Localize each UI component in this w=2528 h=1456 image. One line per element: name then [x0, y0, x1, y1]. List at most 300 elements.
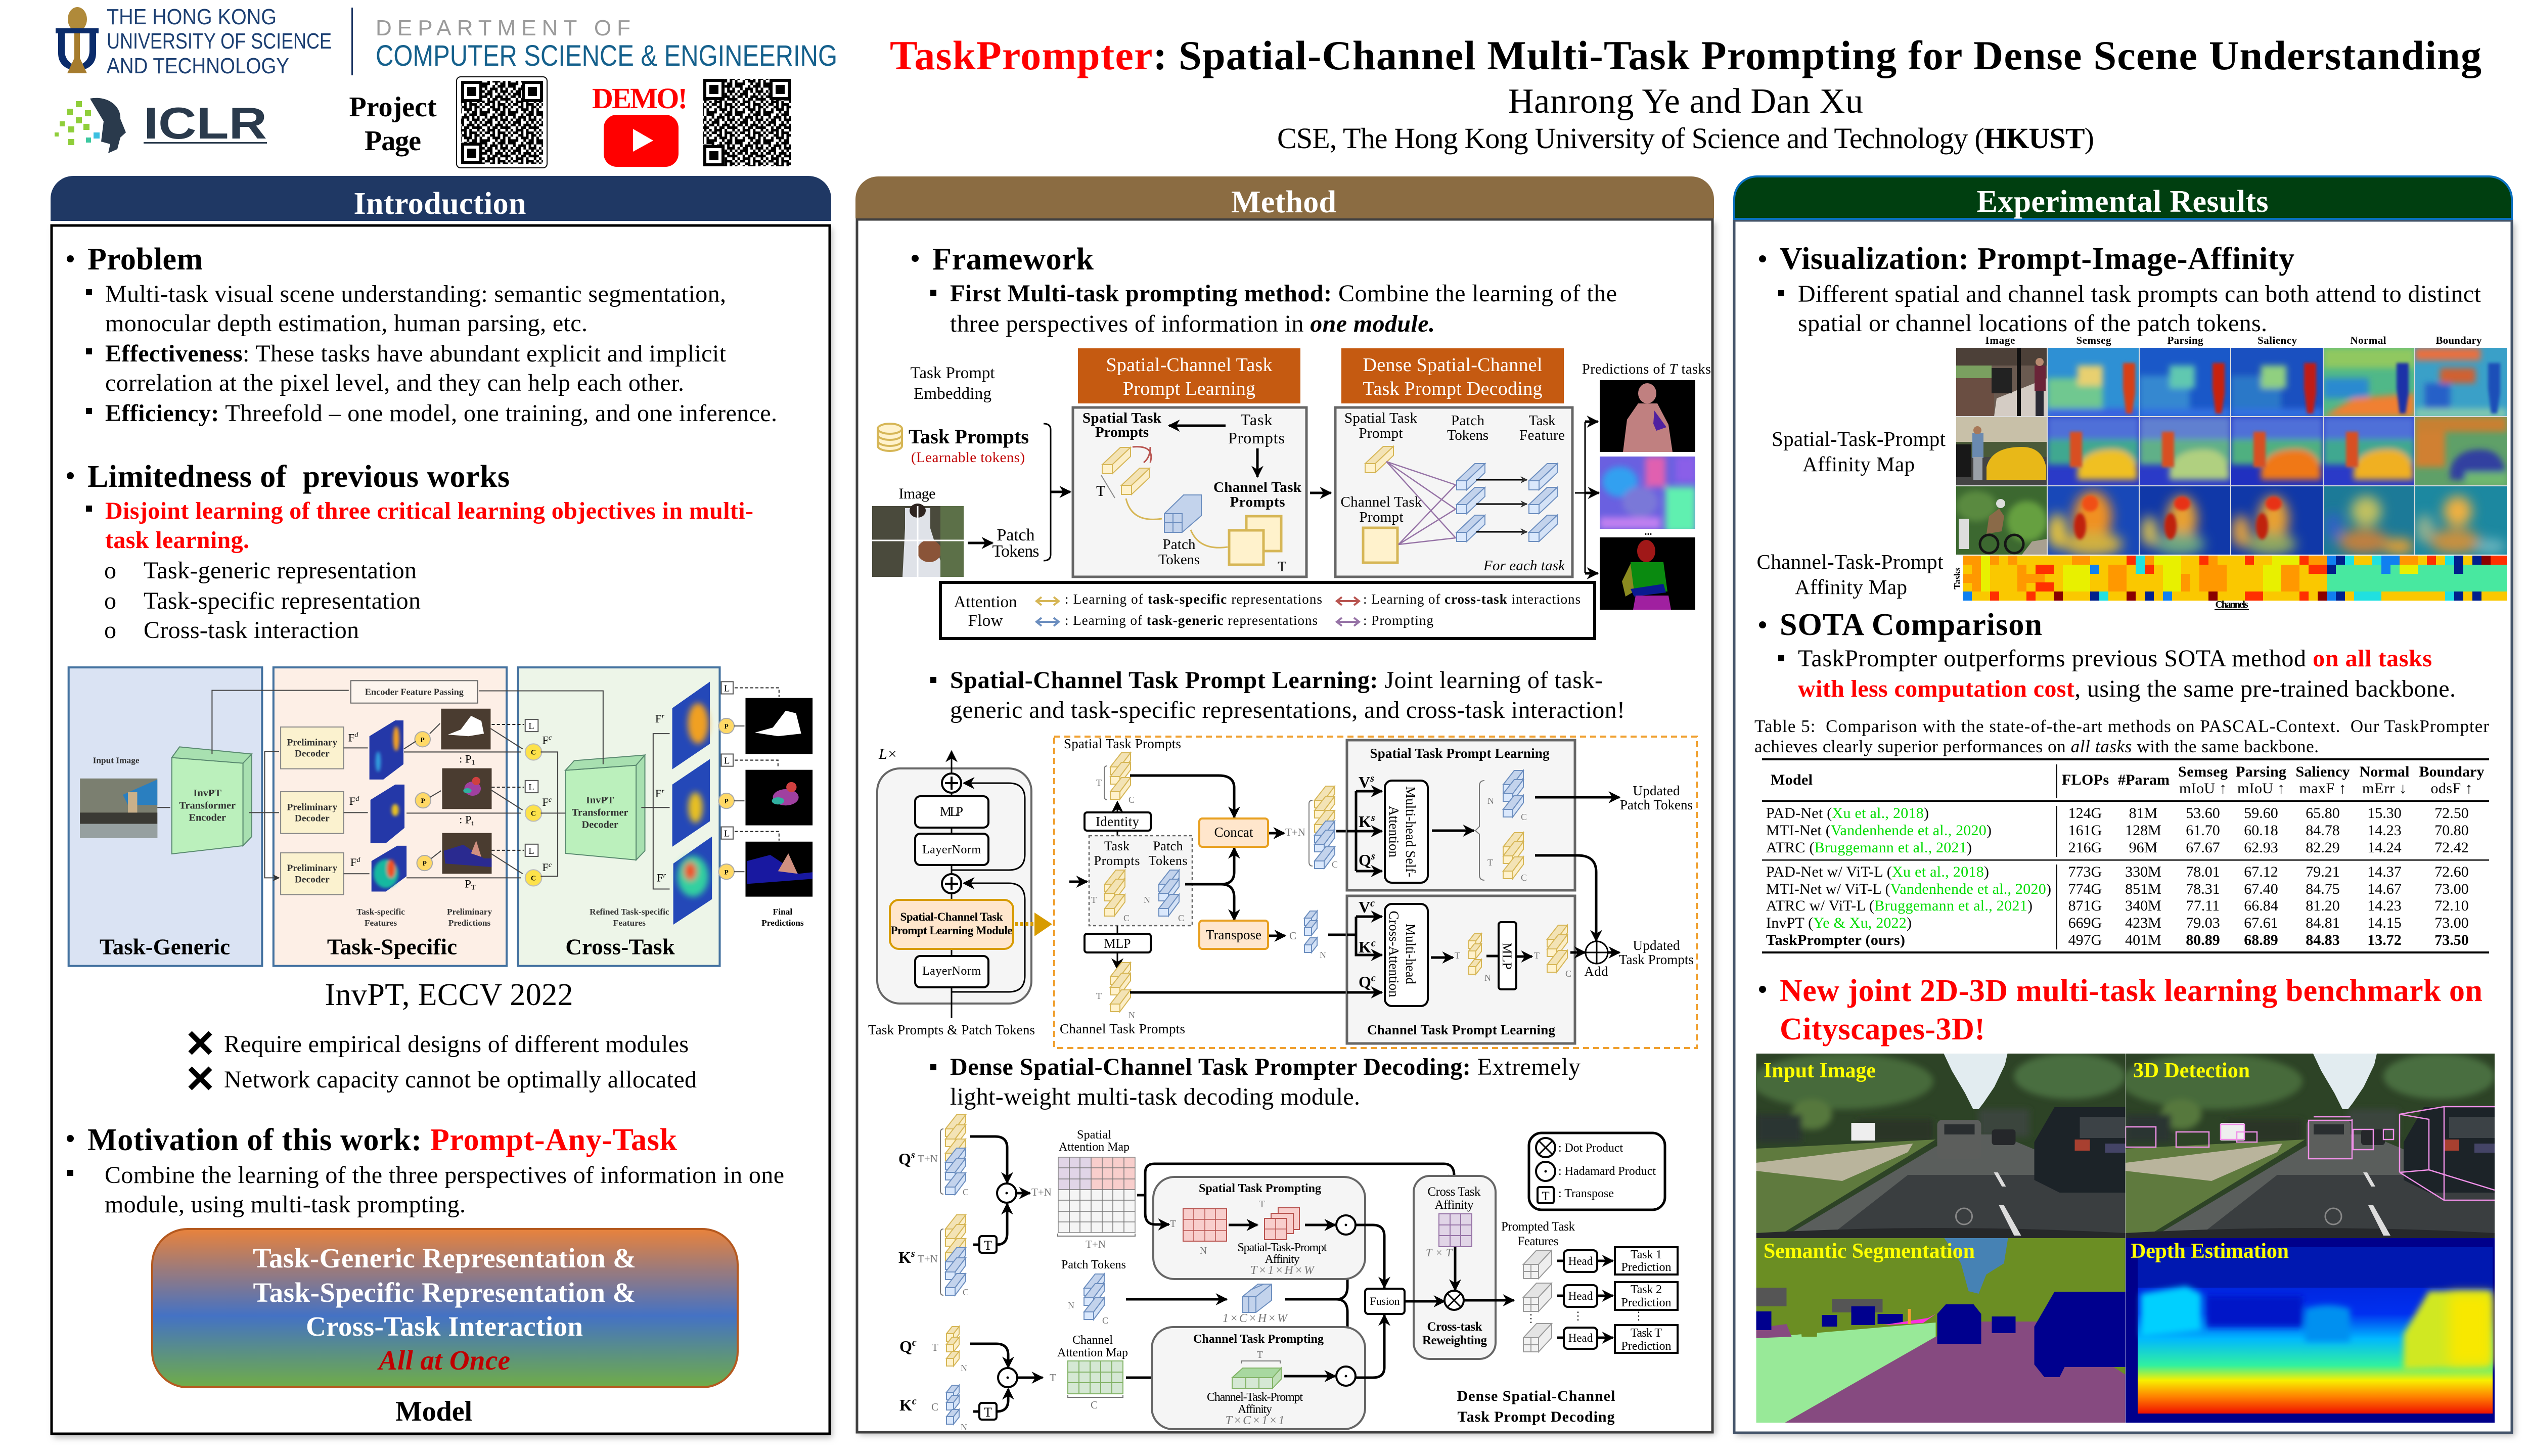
transformer block: LayerNorm: [922, 843, 981, 856]
panel: task-generic: Input Image: [93, 756, 140, 765]
channel attention map: T: [1050, 1372, 1056, 1384]
panel: task-specific: T: [471, 884, 476, 891]
final predictions: Final: [773, 907, 792, 917]
section: problem: Multi-task visual scene understanding: semantic segmentation,: [105, 281, 726, 307]
detail frame: T: [1096, 778, 1102, 788]
box: spatial task prompt learning: N: [1487, 796, 1494, 806]
chart: channel-task-prompt affinity: Channels: [2216, 599, 2248, 610]
table rows: 161G: [2068, 822, 2102, 839]
section: SOTA comparison: SOTA Comparison: [1780, 608, 2042, 642]
box: cross-task reweighting: Cross-task: [1427, 1320, 1482, 1334]
panel: task-generic: Task-Generic: [100, 934, 230, 959]
chart: affinity maps: Saliency: [2258, 334, 2297, 346]
table rows: 67.67: [2186, 839, 2220, 856]
panel: task-specific: 1: [471, 759, 475, 767]
table rows: 14.37: [2367, 863, 2402, 880]
legend: attention flow: : Prompting: [1363, 613, 1433, 628]
panel: task-specific: F: [350, 856, 356, 869]
table: comparison: Boundary: [2419, 763, 2485, 780]
task prompt inputs: (Learnable tokens): [911, 449, 1025, 466]
patch tokens: C: [1102, 1315, 1108, 1326]
box: spatial task prompting: Spatial-Task-Prompt: [1238, 1241, 1327, 1254]
section: limitedness: Cross-task interaction: [144, 617, 359, 644]
detail frame: C: [1123, 913, 1130, 923]
section: limitedness: Task-specific representation: [144, 587, 421, 614]
legend: attention flow: Attention: [954, 593, 1017, 611]
outputs: Add: [1585, 964, 1608, 979]
panel: task-generic: Encoder: [189, 812, 226, 823]
table rows: 14.24: [2367, 839, 2402, 856]
outputs: Patch Tokens: [1620, 797, 1693, 812]
task prompt inputs: [872, 364, 1070, 577]
heading: introduction: [51, 176, 831, 221]
table: comparison: Table 5: Comparison with the state-of-the-art methods on PASCAL-Context. Our TaskPrompter: [1754, 716, 2489, 736]
panel: cross-task: [518, 667, 719, 966]
table rows: 70.80: [2434, 822, 2469, 839]
panel: method: [855, 176, 1716, 1435]
box: prompt decoding: Spatial Task: [1344, 410, 1418, 426]
patch tokens: Patch Tokens: [1061, 1258, 1126, 1271]
table: comparison: mIoU ↑: [2237, 780, 2285, 797]
final predictions: L: [724, 684, 730, 693]
table rows: TaskPrompter (ours): [1766, 932, 1905, 948]
inputs: N: [961, 1422, 967, 1432]
prompted task features and predictions: [1501, 1220, 1678, 1353]
section: problem: correlation at the pixel level, and they can help each other.: [105, 370, 684, 396]
transformer block: Task Prompts & Patch Tokens: [868, 1022, 1035, 1037]
task prompt inputs: Task Prompts: [909, 425, 1029, 448]
section: SOTA comparison: TaskPrompter outperforms previous SOTA method on all tasks: [1798, 645, 2432, 672]
table rows: InvPT (Ye & Xu, 2022): [1766, 915, 1912, 931]
inputs: T: [984, 1238, 992, 1253]
image: input: [1751, 1054, 2126, 1238]
panel: cross-task: c: [549, 734, 552, 742]
project page label: Page: [365, 125, 421, 157]
channel attention map: C: [1091, 1399, 1098, 1411]
table rows: PAD-Net (Xu et al., 2018): [1766, 805, 1929, 822]
table: comparison: mIoU ↑: [2179, 780, 2227, 797]
icon: video play: [604, 115, 679, 167]
task prompt inputs: Task Prompt: [910, 364, 995, 382]
section: dense decoding: [930, 1054, 1581, 1110]
final predictions: L: [724, 829, 730, 839]
box: channel task prompt learning: Q: [1359, 973, 1371, 991]
diagram caption: [1457, 1388, 1615, 1425]
box: prompt decoding: Prompt: [1359, 425, 1403, 441]
section: visualization: spatial or channel locations of the patch tokens.: [1798, 310, 2267, 337]
box: channel task prompting: Affinity: [1238, 1403, 1272, 1416]
section: framework: Framework: [932, 242, 1094, 277]
panel: task-specific: [274, 667, 507, 966]
callout: all at once: Cross-Task Interaction: [306, 1311, 583, 1342]
table rows: 124G: [2068, 805, 2102, 822]
panel: task-specific: d: [356, 856, 360, 864]
box: spatial task prompt learning: s: [1371, 851, 1375, 862]
figure: cityscapes-3D: [1751, 1054, 2495, 1423]
prompted task features and predictions: Prompted Task: [1501, 1220, 1575, 1234]
table rows: 73.00: [2434, 881, 2469, 897]
prompted task features and predictions: Head: [1568, 1255, 1593, 1267]
outputs: Updated: [1633, 783, 1680, 798]
inputs: K: [898, 1248, 911, 1266]
section: motivation: [67, 1123, 784, 1218]
table rows: 72.50: [2434, 805, 2469, 822]
detail frame: T: [1096, 991, 1102, 1001]
final predictions: P: [725, 722, 729, 730]
panel: task-specific: F: [348, 731, 354, 744]
panel: introduction: [51, 176, 832, 1438]
panel: cross-task: r: [661, 712, 664, 720]
chart: channel-task-prompt affinity: [1756, 550, 2507, 610]
box: prompt learning: T: [1278, 559, 1286, 575]
chart: affinity maps: Normal: [2350, 334, 2386, 346]
box: cross-task reweighting: [1405, 1176, 1514, 1359]
panel: task-specific: Task-specific: [356, 907, 405, 917]
section: limitedness: o: [104, 617, 116, 644]
inputs: c: [912, 1396, 917, 1407]
panel: cross-task: C: [531, 874, 536, 882]
panel: task-specific: d: [354, 731, 358, 739]
table rows: 78.01: [2186, 863, 2220, 880]
table: comparison: #Param: [2118, 771, 2170, 788]
box: spatial task prompt learning: T: [1487, 857, 1493, 868]
table rows: 128M: [2125, 822, 2161, 839]
image: input: Input Image: [1764, 1059, 1876, 1082]
predictions: Predictions of T tasks: [1582, 361, 1711, 377]
box: prompt decoding: Patch: [1451, 413, 1484, 429]
panel: cross-task: F: [542, 734, 549, 746]
project page label: Project: [349, 92, 437, 123]
panel: cross-task: F: [542, 861, 549, 874]
detail frame: C: [1128, 795, 1135, 805]
table: comparison: maxF ↑: [2299, 780, 2346, 797]
box: channel task prompt learning: [1347, 896, 1575, 1043]
section: framework: First Multi-task prompting method: Combine the learning of the: [950, 280, 1617, 307]
legend: attention flow: Flow: [968, 612, 1003, 630]
box: channel task prompt learning: C: [1565, 969, 1571, 979]
panel: task-specific: : P: [459, 813, 471, 826]
predictions: [1575, 361, 1711, 610]
legend: attention flow: : Learning of cross-task interactions: [1363, 592, 1581, 607]
drawback list: Network capacity cannot be optimally allocated: [224, 1066, 697, 1093]
section: problem: monocular depth estimation, human parsing, etc.: [105, 310, 588, 337]
panel: task-specific: Preliminary: [447, 907, 492, 917]
channel attention map: Channel: [1072, 1334, 1113, 1347]
table rows: 67.40: [2244, 881, 2278, 897]
section: problem: Effectiveness: These tasks have abundant explicit and implicit: [105, 340, 727, 367]
image: depth estimation: Depth Estimation: [2131, 1240, 2289, 1263]
legend: operators: T: [1542, 1190, 1550, 1203]
section: spatial-channel learning: Spatial-Channel Task Prompt Learning: Joint learning of task-: [950, 667, 1603, 694]
chart: channel-task-prompt affinity: Affinity Map: [1795, 575, 1907, 599]
inputs: Q: [898, 1150, 911, 1168]
diagram caption: Task Prompt Decoding: [1457, 1408, 1615, 1425]
table rows: 61.70: [2186, 822, 2220, 839]
header: spatial-channel task prompt learning: [1078, 348, 1300, 403]
legend: attention flow: : Learning of task-generic representations: [1065, 613, 1318, 628]
legend: operators: [1529, 1133, 1665, 1210]
box: spatial task prompt learning: Attention: [1386, 806, 1402, 857]
box: channel task prompt learning: Multi-head: [1403, 924, 1418, 985]
inputs: T: [984, 1405, 992, 1420]
table rows: 72.60: [2434, 863, 2469, 880]
image: semantic segmentation: Semantic Segmentation: [1764, 1240, 1975, 1263]
row 3 photos: [1956, 486, 2507, 556]
table rows: 79.03: [2186, 915, 2220, 931]
section: visualization: Different spatial and channel task prompts can both attend to distinct: [1798, 281, 2481, 307]
prompted task features and predictions: Features: [1518, 1235, 1558, 1248]
table rows: 66.84: [2244, 897, 2278, 914]
diagram: InvPT: [69, 667, 812, 966]
section: limitedness: o: [104, 557, 116, 584]
task prompt inputs: Image: [899, 485, 935, 502]
inputs: N: [961, 1363, 967, 1373]
panel: task-specific: Decoder: [295, 875, 330, 885]
final predictions: [718, 681, 812, 928]
legend: operators: : Hadamard Product: [1558, 1165, 1656, 1178]
panel: cross-task: L: [528, 782, 534, 792]
panel: cross-task: Transformer: [572, 807, 628, 818]
table rows: 80.89: [2186, 932, 2220, 948]
panel: task-specific: Predictions: [448, 918, 491, 928]
detail frame: Concat: [1214, 825, 1253, 840]
patch tokens: 1×C×H×W: [1223, 1312, 1288, 1325]
box: channel task prompt learning: Cross-Attention: [1386, 911, 1402, 997]
table rows: 773G: [2068, 863, 2102, 880]
box: spatial task prompting: Spatial Task Prompting: [1199, 1182, 1321, 1195]
prompted task features and predictions: Task 2: [1631, 1283, 1662, 1296]
transformer block: Prompt Learning Module: [891, 924, 1012, 937]
legend: attention flow: [940, 582, 1595, 639]
heading: experimental results: Experimental Results: [1977, 185, 2268, 219]
final predictions: L: [724, 756, 730, 766]
diagram: spatial-channel task prompt learning: [868, 736, 1697, 1048]
table rows: 73.00: [2434, 915, 2469, 931]
box: channel task prompt learning: c: [1371, 973, 1376, 984]
header: dense spatial-channel decoding: [1341, 348, 1564, 403]
box: spatial task prompting: [1137, 1164, 1454, 1279]
panel: cross-task: Decoder: [581, 820, 618, 831]
section: problem: Problem: [87, 242, 203, 277]
section: new benchmark: New joint 2D-3D multi-task learning benchmark on: [1780, 974, 2482, 1008]
table rows: 216G: [2068, 839, 2102, 856]
final predictions: P: [725, 868, 729, 876]
table rows: 77.11: [2186, 897, 2220, 914]
table rows: 84.81: [2306, 915, 2340, 931]
prompted task features and predictions: Prediction: [1621, 1261, 1672, 1274]
table rows: 59.60: [2244, 805, 2278, 822]
predictions: ...: [1644, 526, 1652, 537]
chart: channel-task-prompt affinity: Channel-Task-Prompt: [1756, 550, 1944, 573]
panel: task-specific: Decoder: [295, 749, 330, 759]
image: semantic segmentation: [1756, 1238, 2126, 1423]
table rows: 79.21: [2306, 863, 2340, 880]
box: prompt learning: Spatial Task: [1082, 410, 1162, 426]
panel: cross-task: F: [657, 872, 663, 884]
panel: cross-task: F: [655, 712, 661, 725]
box: channel task prompting: T: [1257, 1349, 1263, 1360]
label: model: Model: [395, 1396, 472, 1427]
prompted task features and predictions: Task T: [1631, 1327, 1662, 1340]
panel: task-specific: Encoder Feature Passing: [365, 687, 464, 697]
chart: channel-task-prompt affinity: Tasks: [1952, 567, 1962, 589]
table: comparison: [1754, 716, 2489, 953]
box: spatial task prompt learning: Multi-head Self-: [1403, 786, 1418, 877]
panel: cross-task: L: [528, 846, 534, 856]
panel: task-specific: t: [471, 820, 474, 828]
box: cross-task reweighting: Reweighting: [1422, 1334, 1487, 1347]
panel: cross-task: InvPT: [586, 795, 614, 806]
table rows: 84.83: [2306, 932, 2340, 948]
channel attention map: Attention Map: [1057, 1346, 1128, 1359]
prompted task features and predictions: Prediction: [1621, 1340, 1672, 1353]
inputs: C: [963, 1287, 969, 1297]
detail frame: Prompts: [1094, 853, 1140, 868]
box: cross-task reweighting: T×T: [1426, 1246, 1453, 1259]
section: dense decoding: light-weight multi-task decoding module.: [950, 1083, 1360, 1110]
spatial attention map: T+N: [1086, 1238, 1106, 1250]
section: framework: three perspectives of information in one module.: [950, 310, 1435, 337]
header: [55, 5, 2481, 168]
table: comparison: Saliency: [2295, 763, 2350, 780]
drawback list: Require empirical designs of different modules: [224, 1031, 689, 1058]
detail frame: T+N: [1285, 826, 1305, 838]
table rows: 65.80: [2306, 805, 2340, 822]
table rows: 14.67: [2367, 881, 2402, 897]
header: spatial-channel task prompt learning: Prompt Learning: [1123, 378, 1255, 399]
section: spatial-channel learning: [930, 667, 1625, 723]
box: prompt decoding: Prompt: [1359, 509, 1404, 525]
table rows: 423M: [2125, 915, 2161, 931]
inputs: T+N: [918, 1153, 938, 1165]
section: new benchmark: [1759, 974, 2482, 1046]
transformer block: LayerNorm: [922, 965, 981, 978]
QR code: demo: [703, 79, 791, 166]
table rows: 774G: [2068, 881, 2102, 897]
drawback list: [190, 1031, 697, 1093]
outputs: Updated: [1633, 938, 1680, 953]
table rows: 73.50: [2434, 932, 2469, 948]
inputs: s: [911, 1248, 915, 1259]
detail frame: Tokens: [1149, 853, 1187, 868]
heading: method: Method: [1231, 185, 1336, 219]
task prompt inputs: Tokens: [992, 542, 1040, 561]
callout: all at once: Task-Specific Representation &: [253, 1277, 636, 1308]
box: prompt decoding: Feature: [1519, 427, 1565, 443]
detail frame: N: [1320, 950, 1326, 960]
chart: affinity maps: Spatial-Task-Prompt: [1772, 427, 1946, 450]
header: spatial-channel task prompt learning: Spatial-Channel Task: [1106, 354, 1272, 376]
task prompt inputs: Embedding: [914, 385, 991, 403]
box: prompt learning: Prompts: [1230, 494, 1285, 510]
section: visualization: [1759, 242, 2481, 337]
table rows: 14.15: [2367, 915, 2402, 931]
table rows: MTI-Net (Vandenhende et al., 2020): [1766, 822, 1992, 839]
section: framework: [912, 242, 1617, 337]
inputs: s: [911, 1150, 915, 1161]
box: channel task prompt learning: T: [1455, 950, 1460, 961]
table rows: MTI-Net w/ ViT-L (Vandenhende et al., 2020): [1766, 881, 2051, 897]
box: channel task prompt learning: Channel Task Prompt Learning: [1367, 1022, 1555, 1037]
box: channel task prompt learning: c: [1371, 938, 1376, 949]
detail frame: Patch: [1153, 839, 1183, 853]
prompted task features and predictions: Head: [1568, 1290, 1593, 1302]
box: spatial task prompting: T: [1170, 1218, 1176, 1230]
box: channel task prompt learning: T: [1534, 950, 1540, 961]
detail frame: C: [1178, 913, 1184, 923]
arrow: [1310, 491, 1331, 494]
title: TaskPrompter: Spatial-Channel Multi-Task Prompting for Dense Scene Understanding: [890, 32, 2481, 78]
table: comparison: Parsing: [2236, 763, 2286, 780]
panel: task-specific: P: [465, 878, 471, 890]
table rows: 78.31: [2186, 881, 2220, 897]
panel: task-generic: Transformer: [179, 800, 236, 811]
table rows: 14.23: [2367, 822, 2402, 839]
table rows: 67.12: [2244, 863, 2278, 880]
heading: method: [855, 176, 1714, 219]
panel: task-specific: F: [349, 795, 355, 807]
university name: UNIVERSITY OF SCIENCE: [107, 29, 332, 54]
panel: task-specific: Preliminary: [287, 863, 338, 874]
box: channel task prompting: Channel Task Prompting: [1193, 1333, 1324, 1346]
detail frame: T: [1091, 895, 1097, 905]
caption: InvPT: InvPT, ECCV 2022: [325, 978, 573, 1012]
department name: [376, 16, 837, 72]
box: spatial task prompt learning: Q: [1359, 851, 1371, 869]
detail frame: N: [1144, 895, 1150, 905]
panel: cross-task: Refined Task-specific: [590, 907, 669, 917]
chart: affinity maps: Semseg: [2076, 334, 2111, 346]
section: limitedness: o: [104, 587, 116, 614]
box: prompt learning: Task: [1241, 411, 1272, 429]
table rows: 81.20: [2306, 897, 2340, 914]
box: cross-task reweighting: Cross Task: [1428, 1185, 1481, 1199]
chart: affinity maps: Parsing: [2167, 334, 2203, 346]
section: limitedness: Limitedness of previous works: [87, 460, 510, 494]
box: spatial task prompting: T×1×H×W: [1250, 1264, 1315, 1277]
panel: cross-task: L: [528, 721, 534, 731]
box: spatial task prompting: Affinity: [1265, 1253, 1299, 1266]
callout: all at once: [152, 1229, 738, 1387]
university name: AND TECHNOLOGY: [107, 54, 289, 78]
outputs: [1535, 783, 1694, 979]
box: spatial task prompting: N: [1200, 1245, 1207, 1256]
table: comparison: FLOPs: [2062, 771, 2109, 788]
HKUST logo: [56, 7, 99, 73]
box: prompt decoding: Tokens: [1447, 427, 1488, 443]
box: spatial task prompt learning: s: [1371, 812, 1375, 824]
inputs: c: [912, 1337, 917, 1348]
panel: cross-task: Features: [613, 918, 646, 928]
table rows: 84.75: [2306, 881, 2340, 897]
department name: DEPARTMENT OF: [376, 16, 630, 40]
prompted task features and predictions: Task 1: [1631, 1248, 1662, 1261]
image: 3D detection: 3D Detection: [2133, 1059, 2250, 1082]
box: prompt decoding: Channel Task: [1341, 494, 1422, 510]
section: spatial-channel learning: generic and task-specific representations, and cross-task interaction!: [950, 697, 1625, 723]
table: comparison: achieves clearly superior performances on all tasks with the same backbone.: [1754, 737, 2319, 756]
box: spatial task prompt learning: [1347, 740, 1575, 890]
image: 3D detection: [2120, 1054, 2495, 1238]
table: comparison: mErr ↓: [2362, 780, 2407, 797]
final predictions: Predictions: [761, 918, 804, 928]
transformer block: Spatial-Channel Task: [900, 911, 1003, 923]
table rows: 497G: [2068, 932, 2102, 948]
inputs: C: [931, 1401, 938, 1413]
panel: cross-task: Cross-Task: [565, 934, 675, 959]
section: limitedness: task learning.: [105, 527, 249, 554]
table rows: 62.93: [2244, 839, 2278, 856]
